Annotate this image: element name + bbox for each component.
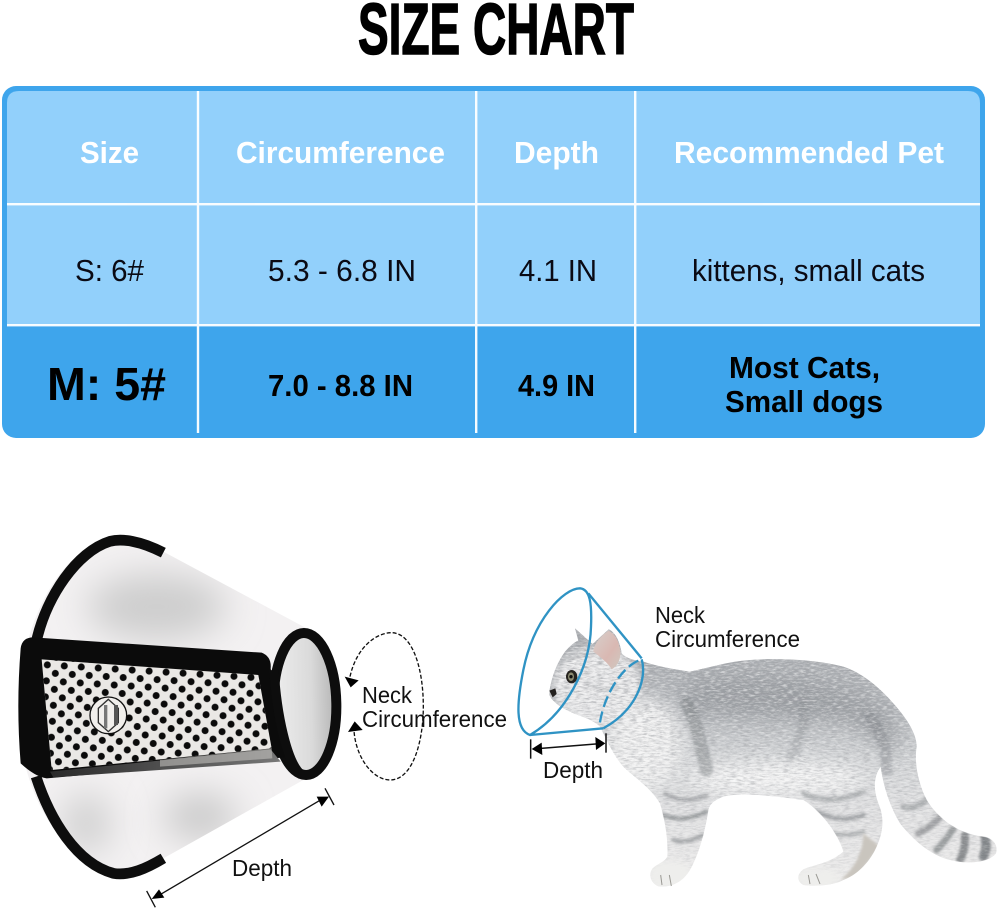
lower strap strip — [50, 749, 281, 777]
hind leg shadow — [841, 834, 878, 880]
ear — [593, 631, 620, 669]
fur texture — [543, 623, 1000, 890]
paws light — [652, 862, 688, 886]
cat labels: Depth — [543, 757, 603, 783]
ring front arc — [274, 670, 302, 775]
row: small size: 4.1 IN — [519, 253, 597, 288]
light rows area — [7, 91, 980, 325]
cone labels: Circumference — [362, 706, 507, 732]
cone outer rim — [36, 540, 163, 874]
cone collar illustration — [0, 520, 423, 907]
row: medium size: Small dogs — [725, 384, 883, 419]
cone labels: Depth — [232, 855, 292, 881]
neck circumference dashed loop — [350, 633, 423, 780]
cat body — [543, 623, 1000, 890]
row: small size: S: 6# — [75, 253, 145, 288]
back shading — [683, 676, 900, 757]
row: medium size: M: 5# — [47, 358, 166, 410]
velcro strap — [18, 637, 285, 778]
cat labels — [543, 602, 800, 783]
table background — [2, 86, 985, 438]
cone outline — [518, 588, 643, 735]
head and chest fur — [553, 647, 640, 727]
cone labels — [232, 682, 507, 881]
cat labels: Neck — [655, 602, 705, 628]
toes — [661, 874, 820, 886]
depth arrow — [531, 733, 606, 759]
header row: Circumference — [236, 135, 445, 170]
row: small size — [75, 253, 925, 288]
header row: Recommended Pet — [674, 135, 944, 170]
belly light — [687, 763, 867, 793]
depth arrow — [147, 788, 334, 907]
neck ring — [272, 632, 338, 776]
arrowheads on loop — [345, 677, 363, 732]
brand badge — [90, 697, 127, 734]
row: small size: 5.3 - 6.8 IN — [268, 253, 416, 288]
cone body — [26, 546, 306, 868]
perforated panel — [42, 659, 272, 770]
row: medium size: 4.9 IN — [518, 368, 595, 403]
size chart table — [2, 86, 985, 438]
cone labels: Neck — [362, 682, 412, 708]
row: medium size: 7.0 - 8.8 IN — [268, 368, 413, 403]
header row: Depth — [514, 135, 599, 170]
cat labels: Circumference — [655, 626, 800, 652]
header row — [80, 135, 944, 170]
row: small size: kittens, small cats — [692, 253, 925, 288]
fur highlights — [550, 630, 991, 861]
nose — [549, 688, 557, 697]
coat stripes — [567, 654, 986, 860]
row: medium size: Most Cats, — [729, 350, 880, 385]
eye — [566, 670, 577, 683]
cat wearing cone — [518, 588, 1000, 890]
row: medium size — [47, 350, 883, 419]
header row: Size — [80, 135, 139, 170]
grid lines — [7, 91, 980, 433]
